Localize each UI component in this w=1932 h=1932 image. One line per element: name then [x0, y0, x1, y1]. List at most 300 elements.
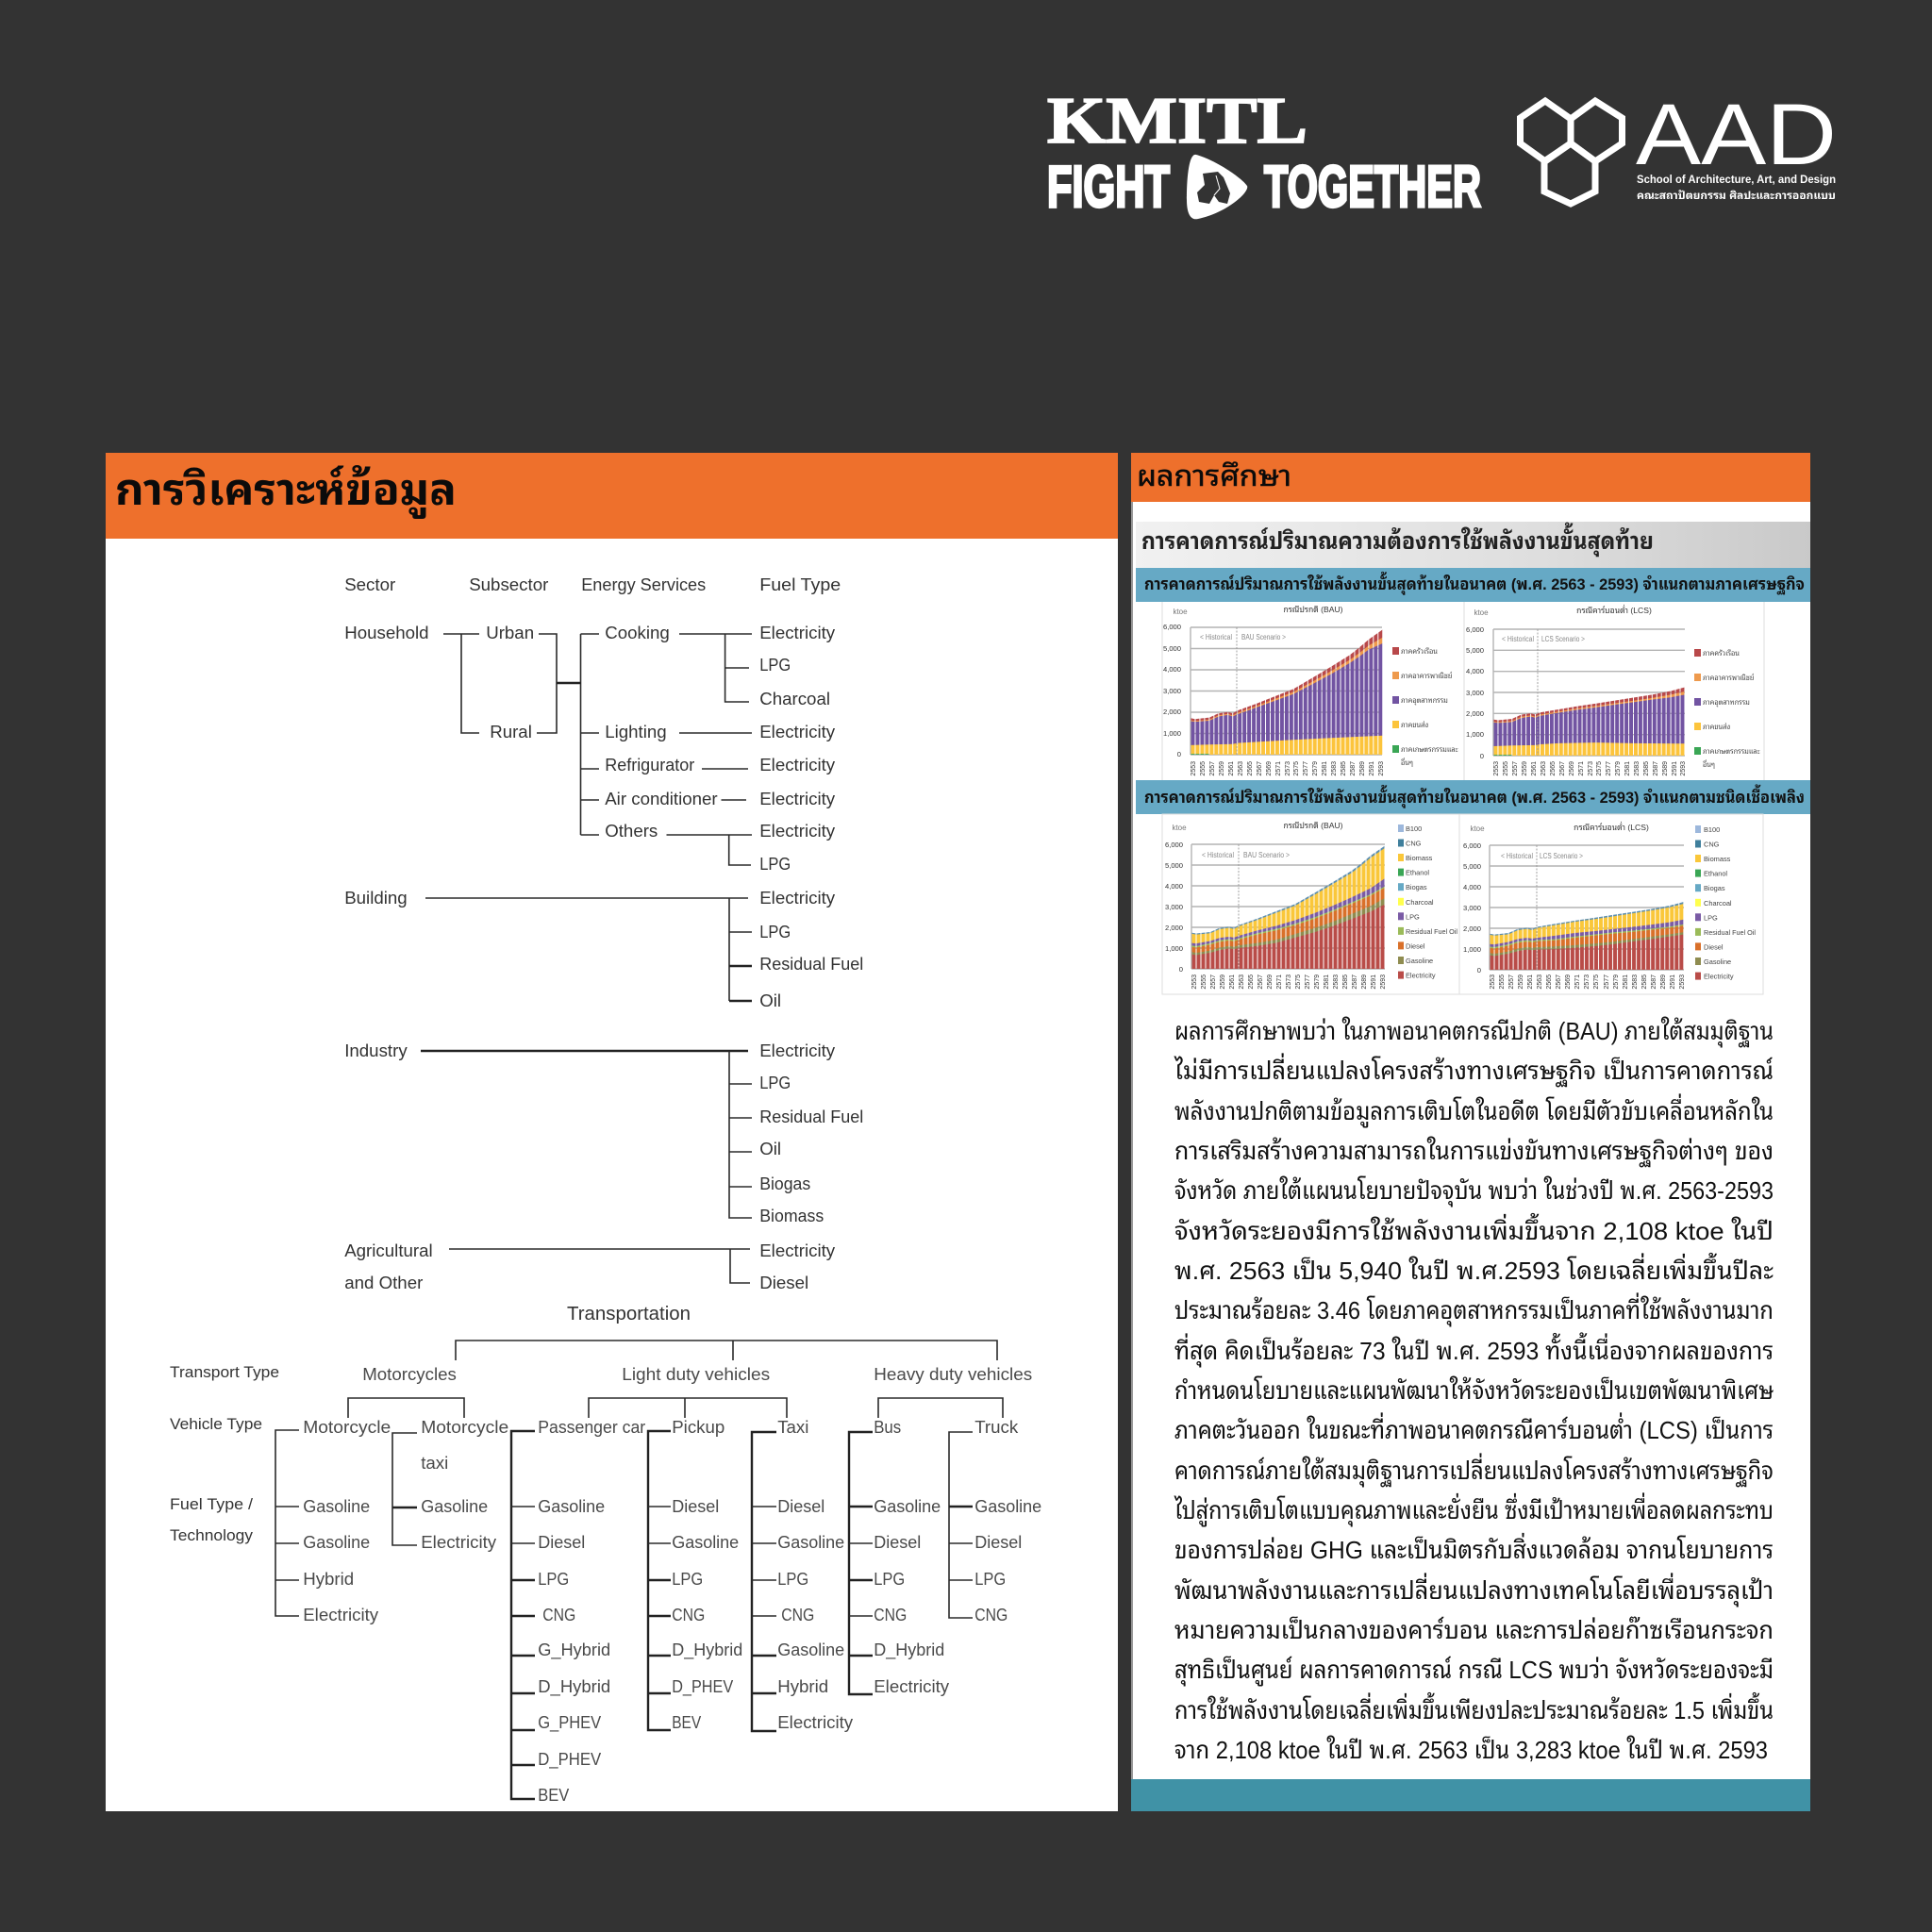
column: pickup: Pickup: [672, 1417, 724, 1437]
chart: fuel BAU: < Historical: [1202, 851, 1234, 859]
tree: agricultural and other: and Other: [344, 1273, 423, 1292]
chart: fuel LCS: 2583: [1632, 974, 1639, 990]
logo: AAD school of architecture: [1521, 87, 1837, 204]
tree: building: Oil: [759, 991, 781, 1010]
chart: sector BAU: 2583: [1331, 761, 1338, 776]
text block: study findings: ภาคตะวันออก ในขณะที่ภาพอนาคตกรณีคาร์บอนต่ำ (LCS) เป็นการ: [1174, 1412, 1774, 1444]
text block: study findings: การเสริมสร้างความสามารถในการแข่งขันทางเศรษฐกิจต่างๆ ของ: [1174, 1136, 1774, 1168]
legend: Residual Fuel Oil: [1704, 928, 1756, 937]
chart: sector LCS: กรณีคาร์บอนต่ำ (LCS): [1576, 604, 1652, 615]
column: taxi: Gasoline: [777, 1640, 844, 1659]
column: bus: Electricity: [874, 1676, 950, 1696]
chart: fuel LCS: 2565: [1546, 974, 1553, 990]
chart: fuel BAU: 2573: [1286, 974, 1292, 990]
chart: fuel BAU: 2565: [1248, 974, 1255, 990]
column headers: Subsector: [469, 575, 548, 594]
chart: sector LCS: ktoe: [1474, 608, 1489, 617]
chart: fuel BAU: ktoe: [1172, 824, 1187, 832]
chart: sector BAU: 2,000: [1163, 708, 1181, 716]
chart: sector BAU: 2591: [1369, 761, 1375, 776]
chart: fuel LCS: 2567: [1556, 974, 1562, 990]
tree: household: Household: [344, 623, 429, 642]
row labels: Fuel Type /: [170, 1495, 253, 1513]
chart: fuel LCS: 2569: [1565, 974, 1572, 990]
chart: sector LCS: 4,000: [1466, 667, 1484, 675]
column: taxi: Taxi: [777, 1417, 808, 1437]
column: motorcycle taxi: [392, 1417, 508, 1552]
column: taxi: Gasoline: [777, 1532, 844, 1552]
chart: sector BAU: 2555: [1200, 761, 1207, 776]
row labels: [170, 1363, 279, 1544]
chart: fuel LCS: 3,000: [1463, 904, 1481, 912]
subheading: final energy demand forecast: [1136, 522, 1810, 568]
column: pickup: Diesel: [672, 1496, 719, 1516]
tree: industry: Oil: [759, 1139, 781, 1158]
legend: LPG: [1704, 913, 1718, 922]
chart: sector BAU: [1162, 602, 1764, 780]
column: motorcycle taxi: Gasoline: [421, 1496, 488, 1516]
column: truck: CNG: [974, 1605, 1008, 1624]
logo: KMITL Fight Together: [1047, 85, 1481, 220]
legend: ภาคเกษตรกรรมและ: [1703, 747, 1760, 756]
column: truck: LPG: [974, 1569, 1006, 1589]
text block: study findings: จาก 2,108 ktoe ในปี พ.ศ. 2563 เป็น 3,283 ktoe ในปี พ.ศ. 2593: [1174, 1735, 1768, 1764]
column headers: Fuel Type: [759, 575, 841, 594]
panel: study results: [1131, 453, 1810, 1811]
column: motorcycle: Gasoline: [303, 1496, 370, 1516]
chart: sector BAU: 2581: [1322, 761, 1328, 776]
chart: sector LCS: 2571: [1578, 761, 1585, 776]
column: bus: LPG: [874, 1569, 905, 1589]
chart: sector BAU: 2563: [1238, 761, 1244, 776]
chart: sector LCS: 2593: [1680, 761, 1687, 776]
chart: fuel BAU: 2575: [1295, 974, 1302, 990]
column: motorcycle taxi: taxi: [421, 1453, 448, 1473]
chart: fuel LCS: 2571: [1574, 974, 1581, 990]
tree: industry: Residual Fuel: [759, 1107, 863, 1126]
chart: fuel BAU: 2555: [1201, 974, 1208, 990]
chart: sector BAU: 2567: [1257, 761, 1263, 776]
chart: fuel BAU: 2591: [1371, 974, 1377, 990]
tagline thai: คณะสถาปัตยกรรม ศิลปะและการออกแบบ: [1637, 189, 1836, 202]
chart: fuel BAU: 1,000: [1165, 944, 1183, 953]
chart: fuel BAU: [1162, 814, 1459, 994]
chart: fuel BAU: กรณีปรกติ (BAU): [1283, 821, 1343, 830]
text block: study findings: ไปสู่การเติบโตแบบคุณภาพและยั่งยืน ซึ่งมีเป้าหมายเพื่อลดผลกระทบ: [1174, 1492, 1774, 1527]
chart: fuel LCS: กรณีคาร์บอนต่ำ (LCS): [1574, 821, 1649, 832]
tree: agricultural and other: Diesel: [759, 1273, 808, 1292]
heading: data analysis: [106, 453, 1118, 539]
text block: study findings: ผลการศึกษาพบว่า ในภาพอนาคตกรณีปกติ (BAU) ภายใต้สมมุติฐาน: [1174, 1016, 1774, 1048]
chart: fuel BAU: 2567: [1257, 974, 1264, 990]
chart: fuel BAU: 5,000: [1165, 861, 1183, 870]
transport types: [362, 1364, 1032, 1384]
column: passenger car: Passenger car: [538, 1417, 645, 1437]
chart: sector LCS: 0: [1480, 752, 1484, 760]
text block: study findings: หมายความเป็นกลางของคาร์บอน และการปล่อยก๊าซเรือนกระจก: [1174, 1616, 1774, 1644]
legend: Charcoal: [1704, 899, 1732, 908]
column: passenger car: D_PHEV: [538, 1749, 602, 1770]
column: bus: Gasoline: [874, 1496, 941, 1516]
column: bus: [849, 1417, 950, 1696]
chart: sector BAU: 2577: [1303, 761, 1309, 776]
chart: sector BAU: 2587: [1350, 761, 1357, 776]
chart: sector BAU: 2557: [1209, 761, 1216, 776]
chart: sector LCS: 2581: [1624, 761, 1631, 776]
chart: fuel BAU: BAU Scenario >: [1243, 851, 1290, 859]
chart: sector LCS: 2569: [1569, 761, 1575, 776]
text block: study findings: สุทธิเป็นศูนย์ ผลการคาดการณ์ กรณี LCS พบว่า จังหวัดระยองจะมี: [1174, 1656, 1774, 1687]
chart: sector LCS: < Historical: [1502, 635, 1534, 643]
text block: study findings: การใช้พลังงานโดยเฉลี่ยเพิ่มขึ้นเพียงปละประมาณร้อยละ 1.5 เพิ่มขึ้น: [1174, 1691, 1774, 1724]
chart: fuel LCS: 2573: [1584, 974, 1591, 990]
legend: Diesel: [1406, 941, 1425, 950]
column: taxi: Electricity: [777, 1712, 854, 1732]
wordmark: AAD: [1636, 87, 1837, 183]
tree: household: Air conditioner: [605, 789, 718, 808]
column: truck: Diesel: [974, 1532, 1022, 1552]
legend: ภาคเกษตรกรรมและ: [1401, 745, 1458, 754]
chart: sector LCS: 2563: [1541, 761, 1547, 776]
transport types: Light duty vehicles: [622, 1364, 770, 1384]
chart: fuel LCS: 2589: [1660, 974, 1667, 990]
column: truck: [949, 1417, 1041, 1624]
legend: B100: [1704, 825, 1720, 834]
chart: sector BAU: ktoe: [1173, 608, 1188, 616]
chart: fuel BAU: 2,000: [1165, 924, 1183, 932]
legend: Diesel: [1704, 942, 1724, 951]
chart: sector LCS: 2583: [1634, 761, 1641, 776]
chart: fuel BAU: 2583: [1333, 974, 1340, 990]
tree: household: Cooking: [605, 623, 670, 642]
chart: sector LCS: 2577: [1606, 761, 1612, 776]
chart: fuel LCS: 2553: [1490, 974, 1496, 990]
tree: household: Refrigurator: [605, 755, 694, 774]
subheading: final energy demand forecast: การคาดการณ์ปริมาณความต้องการใช้พลังงานขั้นสุดท้าย: [1141, 522, 1654, 557]
legend: B100: [1406, 824, 1422, 833]
column: pickup: D_PHEV: [672, 1676, 734, 1697]
column: passenger car: [511, 1417, 645, 1805]
chart: fuel BAU: 2593: [1380, 974, 1387, 990]
icon: raised hands: [1187, 155, 1247, 219]
legend: CNG: [1704, 840, 1720, 849]
stacked bars: [1191, 845, 1385, 969]
stacked bars: [1493, 688, 1685, 756]
tree: industry: Biomass: [759, 1206, 824, 1225]
chart: fuel LCS: 0: [1477, 966, 1481, 974]
logo: KMITL Fight Together: KMITL: [1047, 85, 1307, 158]
chart: fuel LCS: < Historical: [1501, 852, 1533, 860]
tree: household: Electricity: [759, 722, 836, 741]
column: motorcycle: Hybrid: [303, 1569, 354, 1589]
legend: Gasoline: [1406, 957, 1433, 965]
column: passenger car: Diesel: [538, 1532, 585, 1552]
legend: ภาคขนส่ง: [1401, 721, 1428, 729]
row labels: Technology: [170, 1526, 254, 1544]
chart: sector BAU: BAU Scenario >: [1241, 633, 1286, 641]
chart: fuel LCS: 2563: [1537, 974, 1543, 990]
chart: fuel LCS: 1,000: [1463, 945, 1481, 954]
chart: sector LCS: 1,000: [1466, 730, 1484, 739]
legend: [1695, 825, 1756, 981]
column: motorcycle: Gasoline: [303, 1532, 370, 1552]
column: passenger car: Gasoline: [538, 1496, 605, 1516]
column: motorcycle taxi: Electricity: [421, 1532, 497, 1552]
chart: fuel BAU: 2585: [1342, 974, 1349, 990]
column: motorcycle: Motorcycle: [303, 1417, 391, 1437]
chart: sector LCS: 2579: [1615, 761, 1622, 776]
chart: sector LCS: 2573: [1588, 761, 1594, 776]
column: passenger car: D_Hybrid: [538, 1676, 610, 1697]
chart: sector LCS: 5,000: [1466, 646, 1484, 655]
column: taxi: Hybrid: [777, 1676, 828, 1696]
legend: ภาคอุตสาหกรรม: [1703, 698, 1750, 708]
tree: building: LPG: [759, 922, 791, 941]
band: by economic sector: [1136, 568, 1810, 602]
column: passenger car: G_PHEV: [538, 1712, 602, 1733]
legend: Ethanol: [1704, 870, 1727, 878]
tree: industry: Biogas: [759, 1174, 810, 1193]
legend: Biomass: [1704, 855, 1731, 863]
tree: household: Electricity: [759, 789, 836, 808]
chart: sector LCS: 2555: [1503, 761, 1509, 776]
text block: study findings: กำหนดนโยบายและแผนพัฒนาให้จังหวัดระยองเป็นเขตพัฒนาพิเศษ: [1174, 1375, 1774, 1405]
heading: transportation: Transportation: [567, 1304, 691, 1324]
column: taxi: LPG: [777, 1569, 808, 1589]
text block: study findings: พัฒนาพลังงานและการเปลี่ยนแปลงทางเทคโนโลยีเพื่อบรรลุเป้า: [1174, 1573, 1774, 1607]
column: truck: Gasoline: [974, 1496, 1041, 1516]
legend: Biomass: [1406, 854, 1433, 862]
column: motorcycle: Electricity: [303, 1605, 379, 1624]
chart: sector BAU: 5,000: [1163, 644, 1181, 653]
chart: fuel LCS: 2557: [1508, 974, 1515, 990]
heading: study results: ผลการศึกษา: [1137, 459, 1291, 492]
column: motorcycle: [275, 1417, 391, 1624]
legend: ภาคครัวเรือน: [1401, 647, 1438, 656]
chart: sector BAU: 2571: [1275, 761, 1282, 776]
chart: sector BAU: 2569: [1266, 761, 1273, 776]
chart: sector BAU: 2585: [1341, 761, 1347, 776]
chart: fuel LCS: 2587: [1651, 974, 1657, 990]
chart: sector BAU: 2579: [1312, 761, 1319, 776]
column: passenger car: LPG: [538, 1569, 569, 1589]
chart: sector BAU: 2565: [1247, 761, 1254, 776]
chart: sector LCS: 2557: [1512, 761, 1519, 776]
chart: fuel LCS: 6,000: [1463, 841, 1481, 850]
chart: fuel LCS: 2581: [1623, 974, 1629, 990]
chart: fuel LCS: 2555: [1499, 974, 1506, 990]
chart: fuel LCS: 2593: [1679, 974, 1686, 990]
tree: industry: Industry: [344, 1041, 408, 1060]
tree: building: Building: [344, 888, 408, 908]
icon: hexagons: [1521, 101, 1623, 204]
tree: household: LPG: [759, 655, 791, 675]
tagline english: School of Architecture, Art, and Design: [1637, 175, 1836, 186]
tree: industry: Electricity: [759, 1041, 836, 1060]
stacked bars: [1490, 902, 1684, 970]
chart: fuel LCS: 2577: [1604, 974, 1610, 990]
column: taxi: Diesel: [777, 1496, 824, 1516]
chart: sector LCS: 2559: [1522, 761, 1528, 776]
text block: study findings: [1174, 1016, 1774, 1764]
chart: fuel LCS: LCS Scenario >: [1540, 852, 1583, 860]
chart: fuel BAU: 2559: [1220, 974, 1226, 990]
legend: [1392, 647, 1458, 767]
legend: Gasoline: [1704, 958, 1731, 966]
row labels: Vehicle Type: [170, 1415, 262, 1433]
legend: อื่นๆ: [1401, 758, 1413, 767]
chart: fuel BAU: 2571: [1276, 974, 1283, 990]
row labels: Transport Type: [170, 1363, 279, 1381]
chart: fuel BAU: 2579: [1314, 974, 1321, 990]
column: pickup: LPG: [672, 1569, 703, 1589]
chart: fuel LCS: 2575: [1593, 974, 1600, 990]
column: bus: D_Hybrid: [874, 1640, 944, 1660]
transport types: Heavy duty vehicles: [874, 1364, 1032, 1384]
chart: fuel LCS: 2579: [1613, 974, 1620, 990]
legend: ภาคอาคารพาณิชย์: [1401, 672, 1452, 680]
legend: ภาคอาคารพาณิชย์: [1703, 674, 1754, 682]
chart: sector BAU: 2593: [1378, 761, 1385, 776]
column: pickup: CNG: [672, 1605, 705, 1624]
chart: sector BAU: 1,000: [1163, 729, 1181, 738]
tree: household: Electricity: [759, 821, 836, 841]
heading: data analysis: การวิเคราะห์ข้อมูล: [115, 465, 457, 519]
band: by economic sector: การคาดการณ์ปริมาณการใช้พลังงานขั้นสุดท้ายในอนาคต (พ.ศ. 2563 - 2593) จำแนกตามภาคเศรษฐกิจ: [1144, 571, 1805, 595]
chart: fuel BAU: 2587: [1352, 974, 1358, 990]
legend: [1694, 649, 1760, 769]
tree: transportation: [170, 1304, 1041, 1805]
tree: household: Urban: [486, 623, 534, 642]
chart: sector LCS: 2589: [1662, 761, 1669, 776]
legend: ภาคอุตสาหกรรม: [1401, 696, 1448, 706]
tree: building: [344, 888, 863, 1010]
chart: fuel BAU: 4,000: [1165, 882, 1183, 891]
chart: fuel BAU: 2569: [1267, 974, 1274, 990]
logo: KMITL Fight Together: FIGHT: [1047, 155, 1170, 220]
chart: sector LCS: 6,000: [1466, 625, 1484, 634]
text block: study findings: จังหวัด ภายใต้แผนนโยบายปัจจุบัน พบว่า ในช่วงปี พ.ศ. 2563-2593: [1174, 1175, 1774, 1207]
chart: fuel LCS: [1459, 814, 1763, 994]
text block: study findings: พลังงานปกติตามข้อมูลการเติบโตในอดีต โดยมีตัวขับเคลื่อนหลักใน: [1174, 1093, 1774, 1128]
column headers: Energy Services: [581, 575, 706, 594]
legend: Biogas: [1704, 884, 1725, 892]
chart: sector LCS: LCS Scenario >: [1541, 635, 1585, 643]
column: bus: Bus: [874, 1417, 901, 1437]
chart: sector LCS: 2565: [1550, 761, 1557, 776]
legend: Ethanol: [1406, 869, 1429, 877]
chart: fuel BAU: 2581: [1324, 974, 1330, 990]
legend: CNG: [1406, 840, 1422, 847]
band: by fuel type: [1136, 780, 1810, 814]
chart: sector LCS: 2,000: [1466, 709, 1484, 718]
chart: fuel BAU: 2589: [1361, 974, 1368, 990]
chart: fuel BAU: 0: [1179, 965, 1183, 974]
column: passenger car: CNG: [542, 1605, 575, 1624]
chart: sector BAU: กรณีปรกติ (BAU): [1283, 605, 1343, 614]
chart: sector BAU: 3,000: [1163, 687, 1181, 695]
chart: sector BAU: 2561: [1228, 761, 1235, 776]
chart: sector LCS: 2553: [1493, 761, 1500, 776]
band: by fuel type: การคาดการณ์ปริมาณการใช้พลังงานขั้นสุดท้ายในอนาคต (พ.ศ. 2563 - 2593) จำแนกตามชนิดเชื้อเพลิง: [1144, 784, 1805, 808]
heading: study results: [1131, 453, 1810, 502]
chart: fuel LCS: 4,000: [1463, 883, 1481, 891]
text block: study findings: ไม่มีการเปลี่ยนแปลงโครงสร้างทางเศรษฐกิจ เป็นการคาดการณ์: [1174, 1053, 1774, 1088]
tree: building: Residual Fuel: [759, 954, 863, 974]
chart: fuel LCS: 5,000: [1463, 862, 1481, 871]
chart: fuel LCS: 2591: [1670, 974, 1676, 990]
tree: agricultural and other: [344, 1241, 836, 1292]
column: pickup: [648, 1417, 742, 1732]
logo: KMITL Fight Together: TOGETHER: [1264, 155, 1481, 220]
text block: study findings: ที่สุด คิดเป็นร้อยละ 73 ในปี พ.ศ. 2593 ทั้งนี้เนื่องจากผลของการ: [1174, 1332, 1774, 1367]
legend: ภาคครัวเรือน: [1703, 649, 1740, 658]
chart: fuel LCS: 2585: [1641, 974, 1648, 990]
chart: fuel BAU: 3,000: [1165, 903, 1183, 911]
chart: sector BAU: 6,000: [1163, 623, 1181, 631]
tree: industry: [344, 1041, 863, 1225]
chart: sector LCS: 2591: [1672, 761, 1678, 776]
chart: fuel BAU: 2557: [1210, 974, 1217, 990]
chart: sector BAU: 2589: [1359, 761, 1366, 776]
chart: sector LCS: 2575: [1596, 761, 1603, 776]
column: motorcycle taxi: Motorcycle: [421, 1417, 508, 1437]
chart: fuel LCS: 2561: [1527, 974, 1534, 990]
chart: fuel LCS: 2,000: [1463, 924, 1481, 933]
column: passenger car: G_Hybrid: [538, 1640, 610, 1660]
tree: household: Others: [605, 821, 658, 841]
text block: study findings: พ.ศ. 2563 เป็น 5,940 ในปี พ.ศ.2593 โดยเฉลี่ยเพิ่มขึ้นปีละ: [1174, 1252, 1774, 1285]
legend: ภาคขนส่ง: [1703, 723, 1730, 731]
chart: fuel LCS: 2559: [1518, 974, 1524, 990]
chart: fuel BAU: 6,000: [1165, 841, 1183, 849]
column: bus: Diesel: [874, 1532, 921, 1552]
legend: LPG: [1406, 912, 1420, 921]
chart: sector BAU: 4,000: [1163, 665, 1181, 674]
text block: study findings: จังหวัดระยองมีการใช้พลังงานเพิ่มขึ้นจาก 2,108 ktoe ในปี: [1174, 1212, 1774, 1245]
chart: sector BAU: 2575: [1293, 761, 1300, 776]
tree: household: [344, 623, 836, 874]
chart: sector LCS: 2587: [1653, 761, 1659, 776]
text block: study findings: คาดการณ์ภายใต้สมมุติฐานการเปลี่ยนแปลงโครงสร้างทางเศรษฐกิจ: [1174, 1453, 1774, 1488]
text block: study findings: ประมาณร้อยละ 3.46 โดยภาคอุตสาหกรรมเป็นภาคที่ใช้พลังงานมาก: [1174, 1292, 1774, 1326]
chart: fuel BAU: 2563: [1239, 974, 1245, 990]
chart: sector BAU: 2573: [1285, 761, 1291, 776]
chart: sector LCS: 2561: [1531, 761, 1538, 776]
tree: household: Rural: [490, 722, 532, 741]
chart: sector BAU: 0: [1177, 750, 1181, 758]
chart: sector LCS: 3,000: [1466, 689, 1484, 697]
tree: household: Lighting: [605, 722, 667, 741]
chart: sector LCS: [1466, 604, 1760, 776]
tree: household: Electricity: [759, 623, 836, 642]
legend: Residual Fuel Oil: [1406, 927, 1457, 936]
chart: fuel BAU: 2561: [1229, 974, 1236, 990]
chart: sector BAU: < Historical: [1200, 633, 1232, 641]
stacked bars: [1191, 629, 1383, 755]
chart: fuel BAU: 2577: [1305, 974, 1311, 990]
chart: sector LCS: 2585: [1643, 761, 1650, 776]
column headers: [344, 575, 841, 594]
panel: data analysis: [106, 453, 1118, 1811]
chart: fuel BAU: 2553: [1191, 974, 1198, 990]
tree: household: LPG: [759, 854, 791, 874]
legend: Charcoal: [1406, 898, 1434, 907]
tree: household: Charcoal: [759, 689, 830, 708]
legend: อื่นๆ: [1703, 759, 1715, 769]
tree: agricultural and other: Agricultural: [344, 1241, 433, 1260]
legend: Electricity: [1406, 972, 1436, 980]
